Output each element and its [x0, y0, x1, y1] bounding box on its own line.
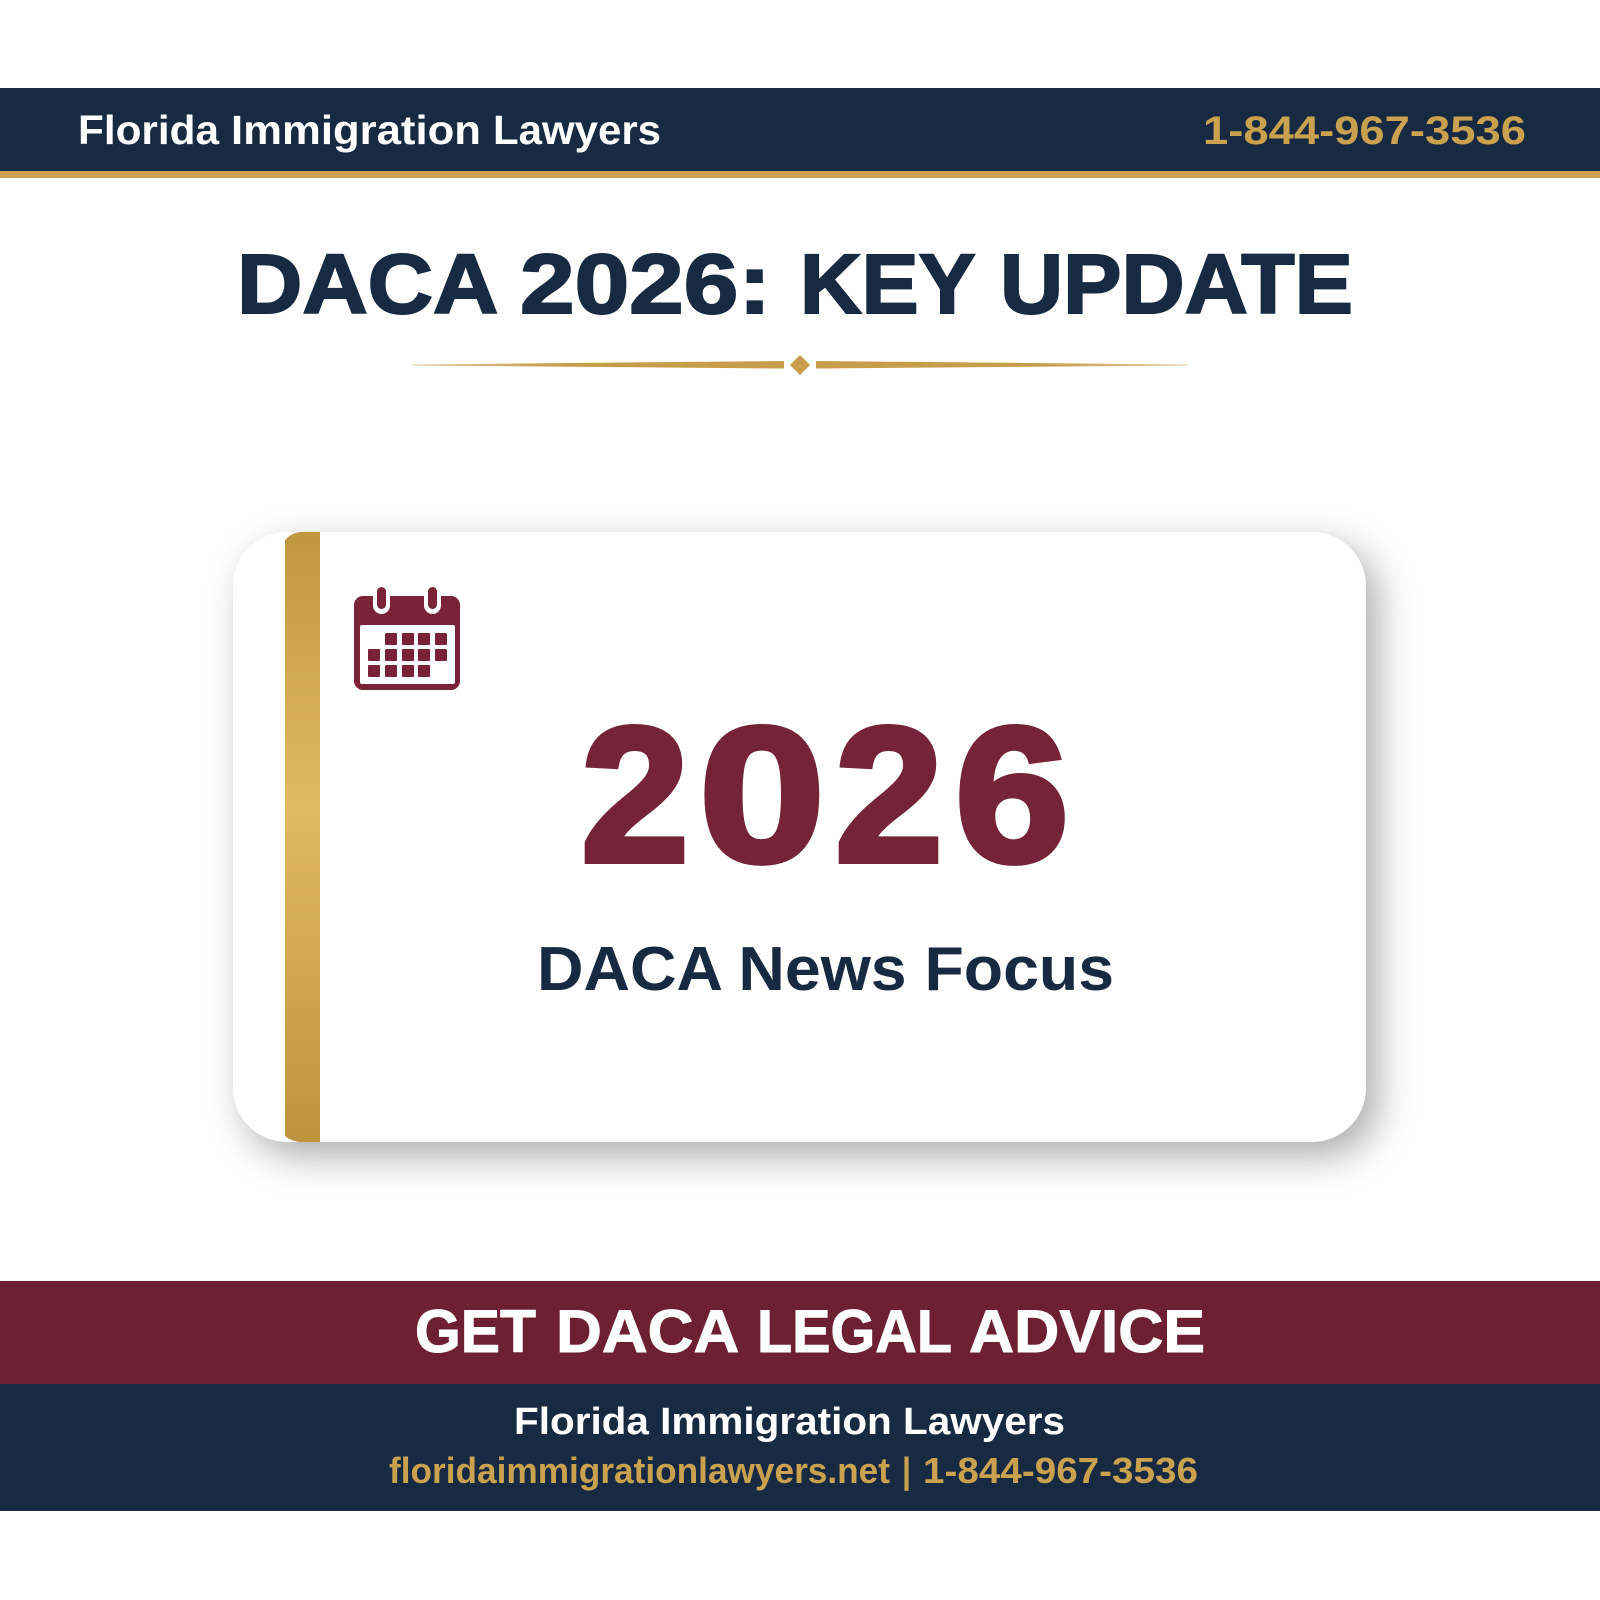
card year: 6 [955, 687, 1069, 902]
card gold strip [285, 532, 320, 1142]
header phone number: 1-844-967-3536 [1203, 109, 1526, 153]
title: KEY [800, 237, 974, 331]
footer firm name: Florida Immigration Lawyers [514, 1401, 1065, 1443]
title: 2026: [520, 237, 771, 331]
card year: 2 [581, 687, 689, 902]
header bar [0, 88, 1600, 178]
header firm name: Immigration [231, 107, 481, 153]
call to action text: LEGAL [757, 1298, 951, 1365]
call to action text: ADVICE [969, 1298, 1205, 1365]
footer website and phone: floridaimmigrationlawyers.net [389, 1450, 890, 1491]
footer website and phone: | [902, 1450, 911, 1492]
title divider with diamond [412, 355, 1188, 375]
call to action band [0, 1281, 1600, 1384]
footer website and phone: 1-844-967-3536 [923, 1450, 1198, 1491]
panel: 2026 card [233, 532, 1378, 1156]
call to action text: GET [415, 1298, 536, 1365]
card year: 0 [699, 687, 825, 902]
card caption: DACA News Focus [537, 935, 1114, 1004]
header firm name: Florida [78, 107, 220, 153]
title: UPDATE [1000, 237, 1353, 331]
icon: calendar [354, 586, 460, 690]
card year: 2 [835, 687, 943, 902]
footer band [0, 1384, 1600, 1511]
call to action text: DACA [556, 1298, 738, 1365]
title: DACA [237, 237, 497, 331]
header firm name: Lawyers [493, 107, 661, 153]
